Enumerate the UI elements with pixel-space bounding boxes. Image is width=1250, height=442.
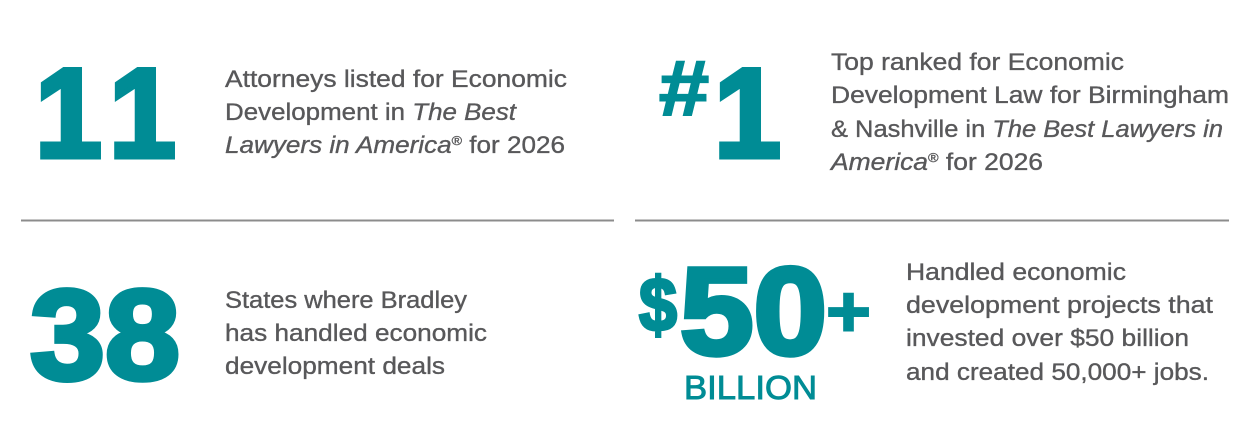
big number: 38: 38: [30, 264, 180, 407]
text block: states: [225, 287, 487, 380]
panel: 38 states: [30, 264, 487, 407]
panel: 11 attorneys: [35, 42, 567, 184]
label: billion: BILLION: [684, 369, 817, 406]
big number: 11: [35, 42, 176, 184]
panel: $50+ billion: [639, 243, 1213, 406]
big number: #1: 1: [714, 42, 781, 184]
text block: handled projects: invested over $50 billion: [906, 325, 1189, 352]
text block: states: States where Bradley: [225, 287, 467, 314]
text block: attorneys listed: Development in The Best: [225, 99, 517, 126]
text block: top ranked: Top ranked for Economic: [831, 49, 1124, 76]
text block: top ranked: & Nashville in The Best Lawyers in: [831, 116, 1223, 143]
big number: 11: 1: [35, 42, 102, 184]
text block: attorneys listed: Attorneys listed for Economic: [225, 66, 567, 93]
text block: top ranked: America: [829, 149, 928, 176]
text block: attorneys listed: Lawyers in America: [225, 132, 452, 159]
panel: number 1 ranking: [659, 42, 1229, 184]
big number: #1: [659, 42, 781, 184]
text block: handled projects: [906, 259, 1213, 386]
text block: states: development deals: [225, 353, 445, 380]
text block: attorneys listed: [225, 66, 567, 159]
text block: top ranked: for 2026: [939, 149, 1043, 176]
text block: handled projects: Handled economic: [906, 259, 1126, 286]
big number: $50+: +: [826, 272, 871, 352]
text block: top ranked: [829, 49, 1229, 176]
big number: 11: 1: [109, 42, 176, 184]
text block: handled projects: and created 50,000+ jobs.: [906, 359, 1209, 386]
text block: attorneys listed: for 2026: [462, 132, 565, 159]
text block: attorneys listed: ®: [452, 133, 462, 148]
text block: top ranked: Development Law for Birmingham: [831, 82, 1229, 109]
big number: $50+: [639, 243, 871, 381]
text block: top ranked: ®: [928, 150, 939, 165]
big number: $50+: 50: [680, 243, 827, 381]
big number: $50+: $: [639, 263, 677, 348]
text block: handled projects: development projects that: [906, 292, 1213, 319]
text block: states: has handled economic: [225, 320, 487, 347]
big number: #1: #: [659, 44, 709, 132]
